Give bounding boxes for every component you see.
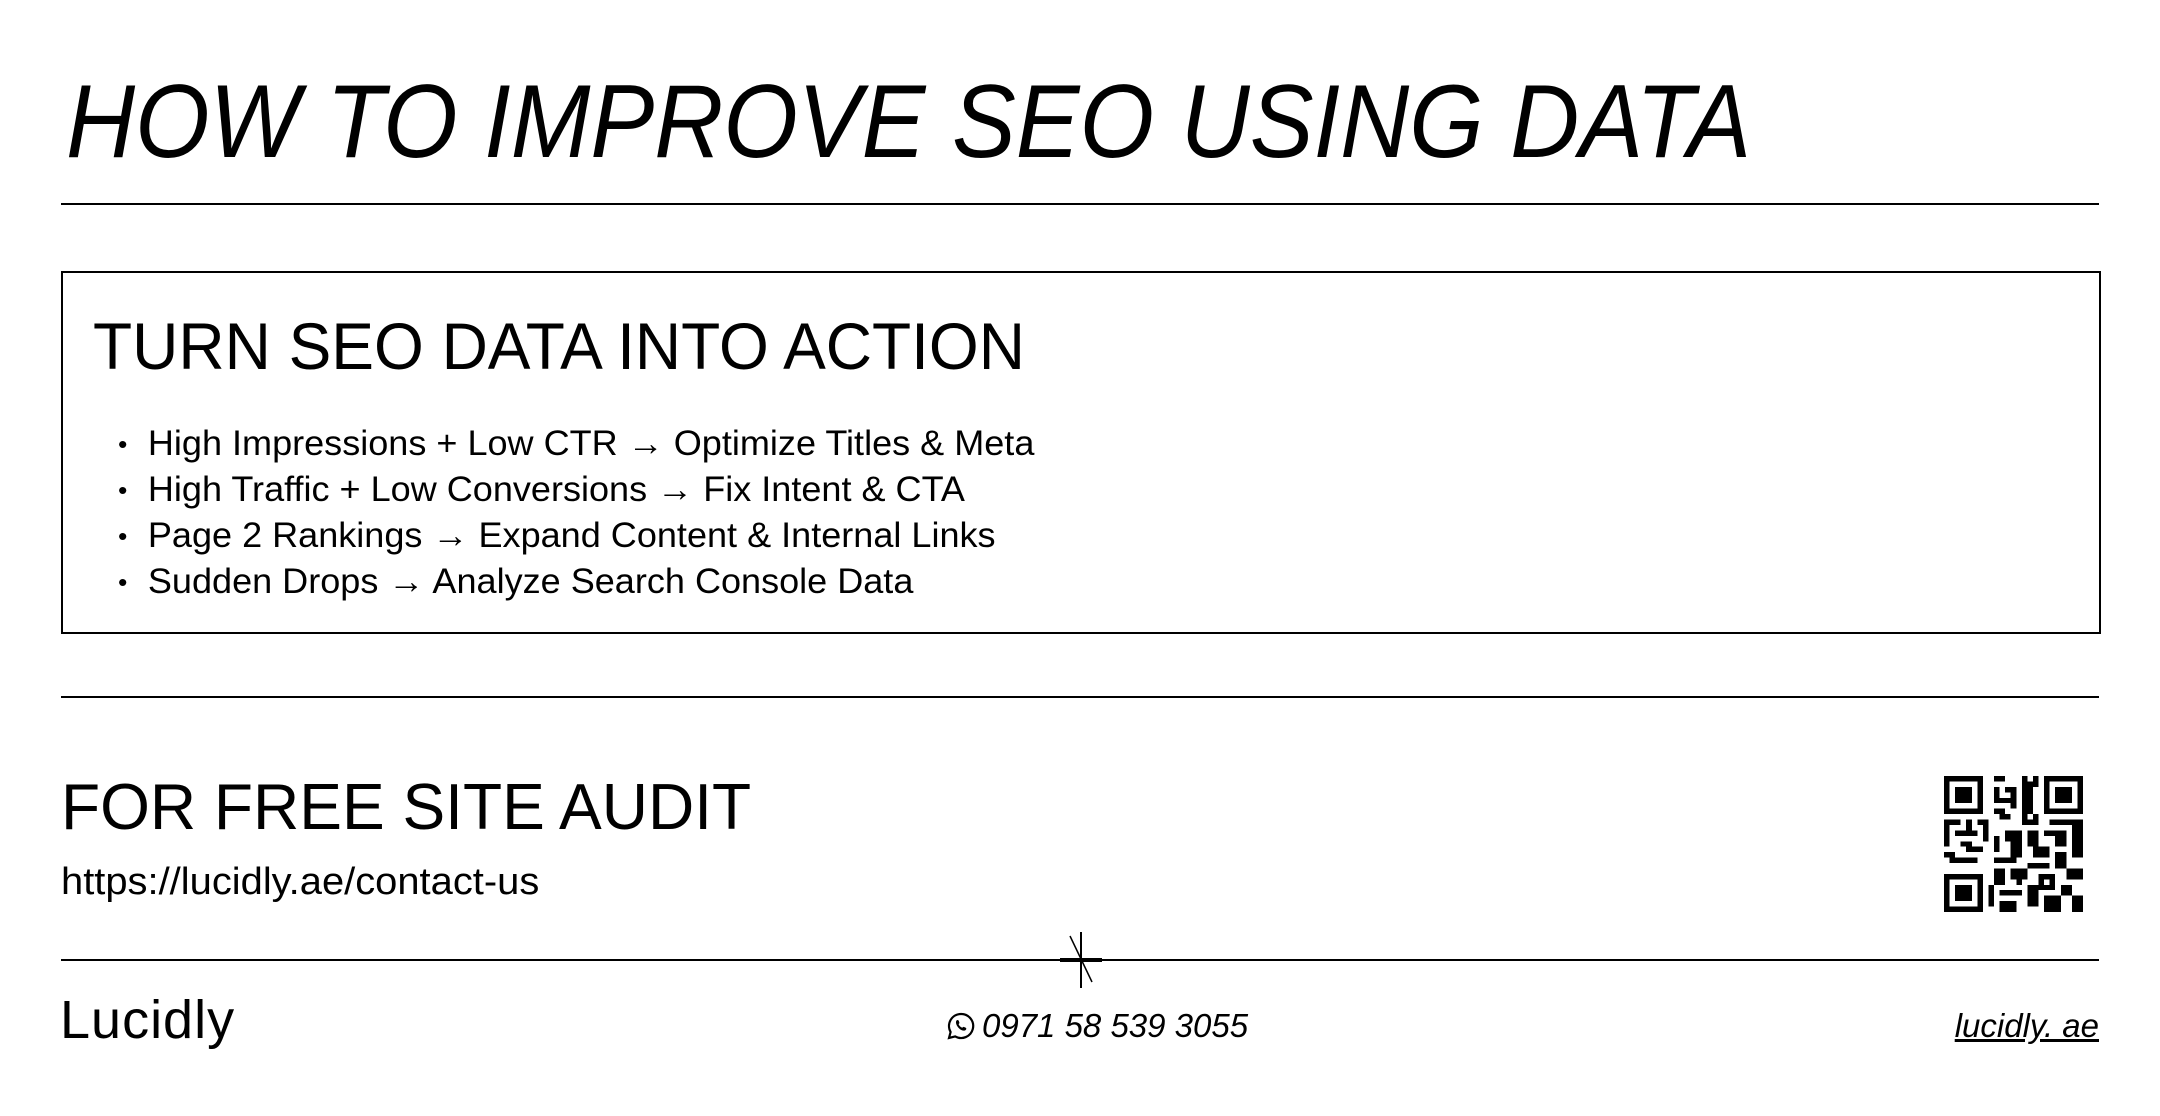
bullet list: High Impressions + Low CTR → Optimize Titles & Meta (148, 424, 1034, 463)
contact url: https://lucidly.ae/contact-us (61, 861, 539, 903)
bullet list: High Traffic + Low Conversions → Fix Intent & CTA (148, 470, 965, 509)
icon: QR code (1944, 776, 2083, 912)
logo: Lucidly: Lucidly (60, 990, 235, 1050)
website link: lucidly. ae (1955, 1007, 2099, 1044)
bullet list (119, 424, 1034, 601)
bullet list: Page 2 Rankings → Expand Content & Internal Links (148, 516, 996, 555)
icon: sparkle mark on divider (1060, 932, 1102, 988)
panel: turn seo data into action (61, 271, 2101, 634)
heading: free site audit: FOR FREE SITE AUDIT (61, 770, 751, 843)
bullet list: Sudden Drops → Analyze Search Console Data (148, 562, 913, 601)
contact phone: 0971 58 539 3055 (982, 1007, 1248, 1044)
title: HOW TO IMPROVE SEO USING DATA (66, 64, 1751, 180)
panel heading: TURN SEO DATA INTO ACTION (93, 309, 1025, 383)
